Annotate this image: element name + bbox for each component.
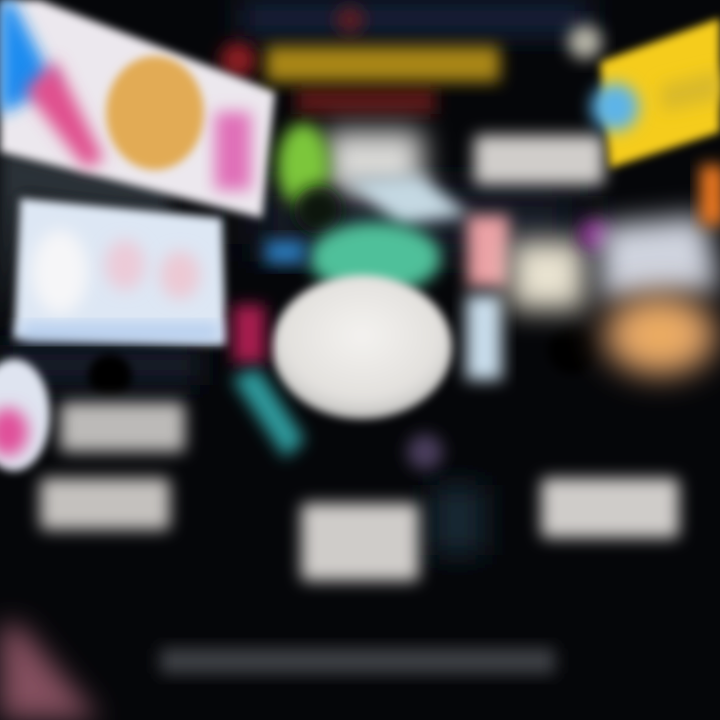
icon: central sphere <box>232 222 452 458</box>
panel: top-left banner <box>0 0 275 218</box>
panel: left lower round chart <box>0 359 50 471</box>
label: left upper <box>60 402 185 452</box>
icon: pink tag <box>215 112 251 190</box>
label: top center-right <box>474 135 604 185</box>
panel: right glowing screen <box>588 165 720 387</box>
panel: top-right yellow banner <box>568 18 720 168</box>
icon: blue corner shape <box>0 0 55 115</box>
label: top center <box>325 130 423 192</box>
panel: left monitor <box>14 198 226 345</box>
bottom-left pink shape <box>0 625 100 720</box>
panel: center-right pastel column <box>407 215 611 470</box>
caption <box>160 648 555 674</box>
icon: pink streak <box>25 60 104 168</box>
label: left lower <box>40 478 170 530</box>
person silhouettes <box>88 326 596 398</box>
icon: blue circle <box>591 83 639 131</box>
label: right lower <box>541 478 679 538</box>
title bar <box>266 46 500 82</box>
center pale wedge <box>345 175 470 225</box>
icon: green leaf <box>277 123 329 207</box>
label: center lower <box>301 503 419 581</box>
icon: gold medallion <box>106 56 204 170</box>
